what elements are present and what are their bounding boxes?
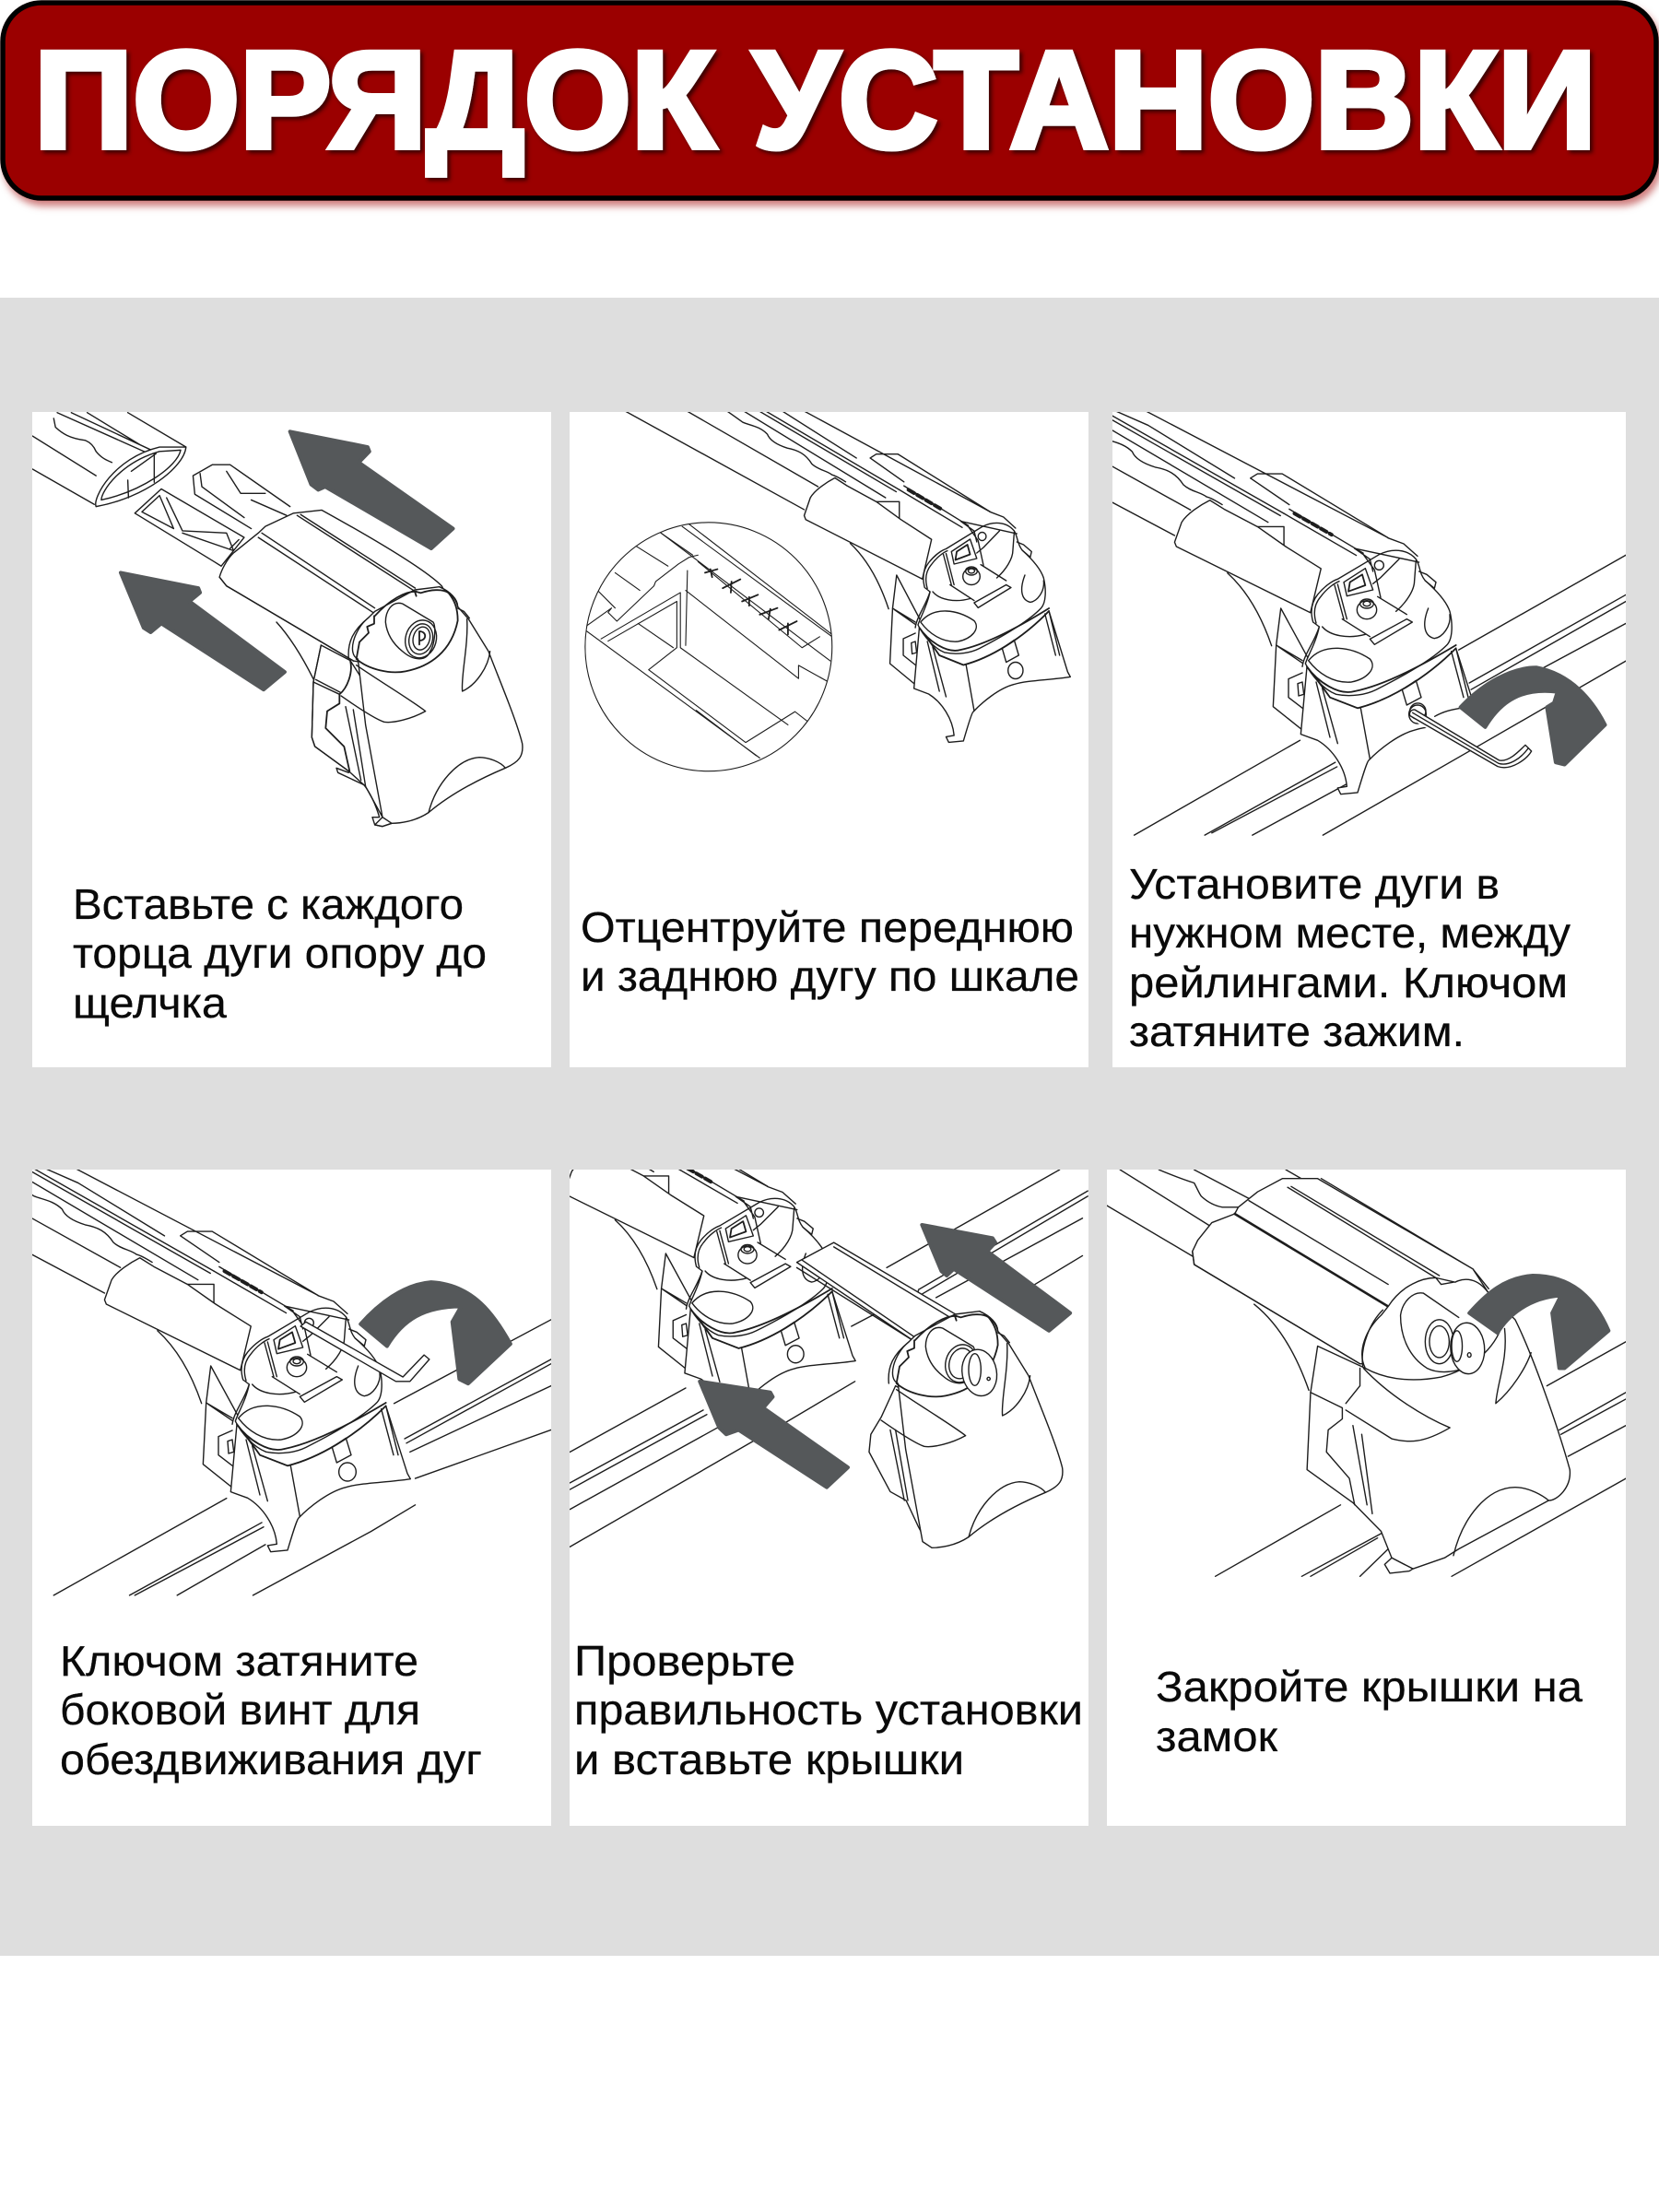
panel: step 6 lock covers xyxy=(1106,1170,1626,1826)
text: step 1 caption: торца дуги опору до xyxy=(73,929,487,977)
title banner xyxy=(3,3,1656,198)
rails xyxy=(1135,555,1626,835)
panel: step 2 center by scale xyxy=(570,412,1088,1067)
arrow: curved turn arrow xyxy=(1461,667,1606,765)
text: step 6 caption xyxy=(1156,1663,1583,1760)
illustration: clamp with key on top xyxy=(32,1170,551,1596)
illustration: clamp on rails with hex key xyxy=(1112,412,1626,836)
text: step 2 caption: и заднюю дугу по шкале xyxy=(581,952,1079,1000)
illustration: clamp and cover with key xyxy=(570,1170,1088,1548)
panel: step 4 side screw xyxy=(32,1170,551,1826)
text: step 2 caption xyxy=(581,903,1079,1000)
text: step 5 caption: и вставьте крышки xyxy=(574,1735,964,1783)
text: step 4 caption: Ключом затяните xyxy=(60,1637,418,1685)
arrow: curved turn arrow xyxy=(360,1282,511,1383)
text: step 3 caption: нужном месте, между xyxy=(1129,909,1571,957)
hex key xyxy=(1409,703,1532,768)
text: step 3 caption xyxy=(1129,860,1571,1055)
text: step 6 caption: Закройте крышки на xyxy=(1156,1663,1583,1711)
text: step 1 caption: Вставьте с каждого xyxy=(73,880,464,928)
text: step 4 caption: обездвиживания дуг xyxy=(60,1735,482,1783)
arrow: lower push arrow xyxy=(121,572,285,689)
text: step 1 caption: щелчка xyxy=(73,979,227,1027)
arrow: lower push arrow xyxy=(700,1382,848,1488)
cover with lock and key xyxy=(796,1242,958,1540)
text: step 5 caption xyxy=(574,1637,1083,1783)
text: step 4 caption xyxy=(60,1637,482,1783)
illustration: closed clamp with key xyxy=(1106,1170,1626,1576)
text: step 3 caption: рейлингами. Ключом xyxy=(1129,959,1568,1006)
rails xyxy=(570,1170,1088,1547)
panel: step 3 tighten clamp xyxy=(1112,412,1626,1067)
arrow: upper push arrow xyxy=(290,431,453,548)
rails xyxy=(53,1320,551,1595)
inset circle with scale detail xyxy=(585,523,832,771)
text: step 3 caption: затяните зажим. xyxy=(1129,1007,1465,1055)
arrow: curved turn arrow xyxy=(1469,1276,1608,1368)
grey section background xyxy=(0,298,1659,1956)
panel: step 1 insert supports xyxy=(32,412,551,1067)
text: step 5 caption: Проверьте xyxy=(574,1637,795,1685)
text: step 1 caption xyxy=(73,880,487,1027)
text: step 6 caption: замок xyxy=(1156,1712,1278,1760)
text: step 2 caption: Отцентруйте переднюю xyxy=(581,903,1074,951)
hex key xyxy=(300,1322,429,1382)
panel: step 5 insert covers xyxy=(570,1170,1088,1826)
illustration: bar end and support with lock xyxy=(32,413,523,827)
text: step 4 caption: боковой винт для xyxy=(60,1686,420,1734)
text: step 5 caption: правильность установки xyxy=(574,1686,1083,1734)
illustration: open clamp and magnified scale xyxy=(575,288,1070,771)
title: ПОРЯДОК УСТАНОВКИ xyxy=(34,22,1596,177)
text: step 3 caption: Установите дуги в xyxy=(1129,860,1500,908)
arrow: upper push arrow xyxy=(922,1225,1070,1331)
